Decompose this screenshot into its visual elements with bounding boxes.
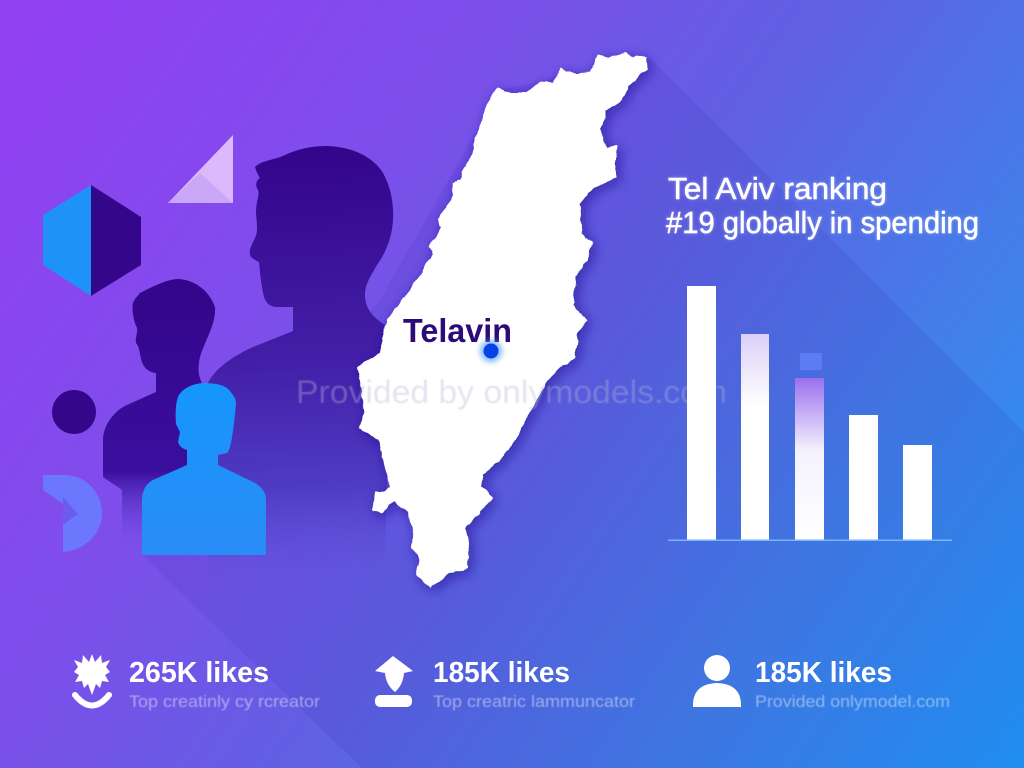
caption: Top creatric lammuncator xyxy=(433,692,635,711)
silhouette: medium person xyxy=(103,279,215,545)
heading: Tel Aviv ranking xyxy=(668,171,887,206)
map xyxy=(358,53,648,587)
watermark: Provided by onlymodels.com xyxy=(296,374,727,410)
map label: Telavin: Telavin xyxy=(403,312,512,349)
long shadow behind figures and map xyxy=(142,58,1024,768)
bar chart xyxy=(668,286,952,541)
map marker xyxy=(480,340,502,362)
caption: Provided onlymodel.com xyxy=(755,692,950,711)
value: 185K likes xyxy=(755,657,892,689)
value: 265K likes xyxy=(129,657,269,689)
stat: 185K likes centre xyxy=(375,656,635,711)
stat: 185K likes right xyxy=(693,655,950,711)
icon: hexagon xyxy=(43,185,141,296)
heading: #19 globally in spending xyxy=(666,205,979,240)
silhouette: large person xyxy=(208,146,393,575)
icon: rounded arrow shape xyxy=(43,475,102,552)
icon: burst with smile xyxy=(74,654,110,706)
value: 185K likes xyxy=(433,657,570,689)
illustration: people silhouettes and shapes xyxy=(43,135,393,575)
stat: 265K likes xyxy=(74,654,320,711)
icon: triangle xyxy=(168,135,233,203)
icon: arrow on base xyxy=(375,656,413,707)
caption: Top creatinly cy rcreator xyxy=(129,692,320,711)
icon: person xyxy=(693,655,741,707)
heading xyxy=(666,171,979,240)
icon: dark circle xyxy=(52,390,96,434)
silhouette: blue person xyxy=(142,383,266,555)
